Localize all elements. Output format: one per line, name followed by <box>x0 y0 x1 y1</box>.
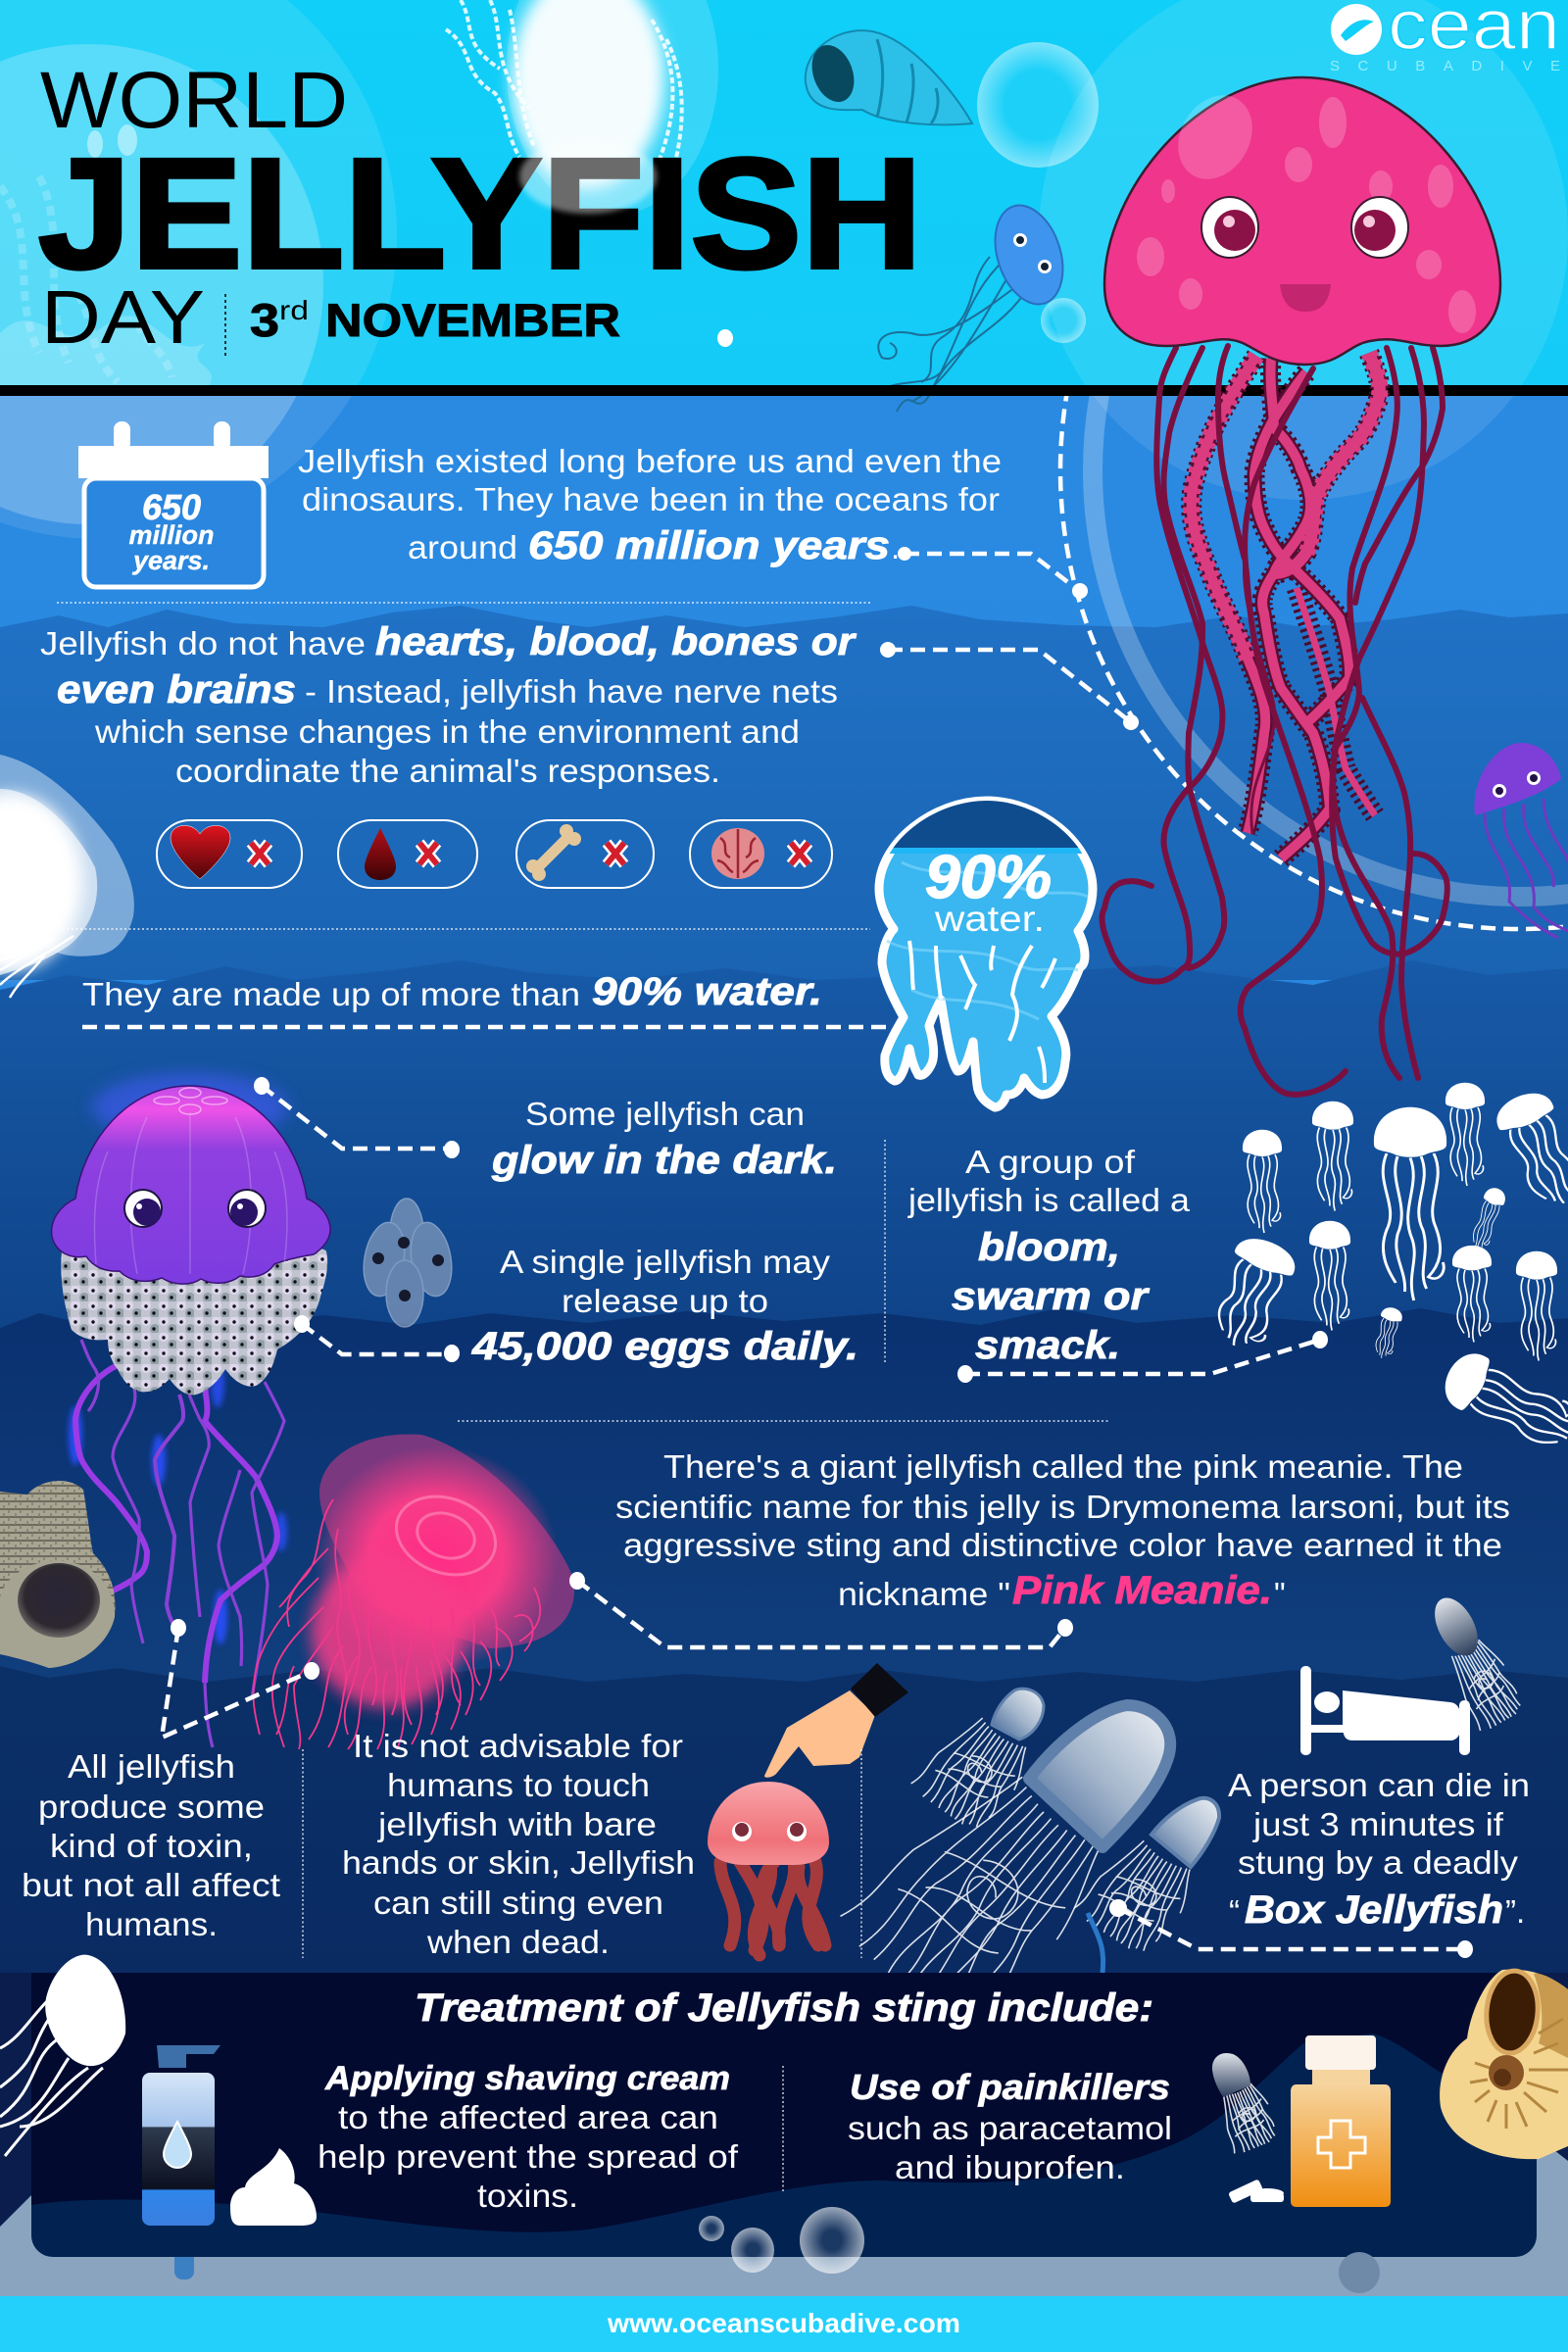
header divider band <box>0 385 1568 396</box>
calendar icon <box>78 421 269 587</box>
treatment: shaving cream: toxins. <box>477 2178 578 2214</box>
connector: bloom <box>957 1331 1328 1383</box>
connector: eggs <box>294 1315 460 1362</box>
header decoration: white jellyfish top centre <box>446 0 718 216</box>
eyes <box>1201 197 1408 258</box>
fact: 650 million years <box>298 443 1002 567</box>
glow around pink jellyfish <box>1039 0 1568 500</box>
big bubble <box>977 42 1099 168</box>
bubbles <box>699 2207 1380 2293</box>
eyes <box>124 1190 266 1227</box>
fact: bloom, swarm or smack: A group of <box>965 1144 1136 1180</box>
glowing body <box>314 1446 559 1671</box>
white jellyfish bloom <box>1201 1083 1568 1463</box>
connector: toxin <box>162 1619 319 1738</box>
drip below panel <box>174 2244 194 2279</box>
treatment: shaving cream: to the affected area can <box>338 2099 718 2135</box>
grey shell <box>0 1481 116 1668</box>
fact: toxin: produce some <box>38 1788 265 1825</box>
treatment: shaving cream: Applying shaving cream <box>324 2060 730 2097</box>
logo: SCUBADIVE <box>1330 58 1560 74</box>
lower seabed band <box>0 2146 1568 2296</box>
fact: no hearts, blood, bones or brains: which sense changes in the environment and <box>94 713 800 750</box>
icon: left white jellyfish over panel <box>0 1955 125 2156</box>
title: DAY <box>41 275 205 360</box>
small blue jellyfish <box>877 197 1075 412</box>
fact: box jellyfish: just 3 minutes if <box>1252 1806 1504 1842</box>
treatment: painkillers <box>848 2067 1172 2185</box>
tentacles <box>69 1340 287 1747</box>
icon: brain crossed <box>690 820 832 888</box>
purple glowing jellyfish <box>52 1073 330 1747</box>
fact: toxin: but not all affect <box>22 1867 280 1903</box>
rings <box>385 1484 507 1588</box>
treatment: painkillers: and ibuprofen. <box>895 2149 1125 2185</box>
icon: eggs <box>359 1199 457 1327</box>
fact: bloom, swarm or smack: jellyfish is called a <box>907 1182 1191 1218</box>
fact: 650 million years: around <box>408 529 517 565</box>
fact: bloom, swarm or smack: smack. <box>975 1324 1120 1367</box>
fact: do not touch: hands or skin, Jellyfish <box>342 1844 695 1881</box>
fact: 90% water: 90% water. <box>592 970 822 1013</box>
fact: no hearts, blood, bones or brains: Jellyfish do not have <box>40 625 366 662</box>
icon: blue shell <box>805 30 972 124</box>
fact: 45,000 eggs: release up to <box>562 1283 768 1319</box>
fact: box jellyfish <box>1228 1767 1530 1932</box>
treatment: painkillers: such as paracetamol <box>848 2110 1172 2146</box>
fact: glow in the dark <box>491 1096 837 1182</box>
dashed circle <box>1058 396 1563 931</box>
fact: box jellyfish: stung by a deadly <box>1238 1844 1519 1881</box>
ring around jellyfish <box>1083 396 1568 906</box>
icon: pointing hand <box>764 1663 908 1778</box>
panel: treatment <box>31 1973 1537 2257</box>
fact: 650 million years: dinosaurs. They have been in the oceans for <box>302 481 1000 517</box>
water jellyfish 90% <box>872 794 1098 1107</box>
fact: pink meanie: " <box>1274 1576 1286 1612</box>
icon: bone crossed <box>516 820 654 888</box>
fact: no hearts, blood, bones or brains <box>40 620 858 789</box>
fact: box jellyfish: Box Jellyfish <box>1245 1888 1503 1932</box>
big pink jellyfish <box>1102 77 1500 1095</box>
title: WORLD <box>40 56 348 145</box>
connector: box jellyfish <box>1109 1899 1473 1958</box>
small bubble <box>1041 298 1086 343</box>
bell <box>1104 77 1500 365</box>
fact: do not touch: humans to touch <box>387 1767 650 1803</box>
fact: toxin: humans. <box>85 1906 218 1942</box>
fact: 45,000 eggs: 45,000 eggs daily. <box>471 1325 858 1368</box>
fact: 45,000 eggs <box>471 1244 858 1368</box>
logo <box>1330 0 1560 74</box>
small box jellyfish in panel <box>1212 2053 1281 2156</box>
treatment: shaving cream: help prevent the spread of <box>318 2138 739 2175</box>
fact: 45,000 eggs: A single jellyfish may <box>500 1244 831 1280</box>
glow <box>92 1073 288 1142</box>
connector: 650 million years <box>898 547 1088 599</box>
fact: do not touch: can still sting even <box>373 1885 663 1921</box>
right small box jellyfish <box>1072 1798 1219 1962</box>
fact: toxin <box>22 1748 280 1942</box>
icon: pills <box>1228 2179 1284 2204</box>
outer bell <box>319 1434 574 1648</box>
fact: bloom, swarm or smack <box>907 1144 1191 1367</box>
fact: do not touch: It is not advisable for <box>353 1728 683 1764</box>
icon: heart crossed <box>157 820 302 888</box>
fact: do not touch: jellyfish with bare <box>377 1806 657 1842</box>
header decoration: pale jellyfish left <box>0 0 397 539</box>
fact: no hearts, blood, bones or brains: hearts, blood, bones or <box>375 620 858 663</box>
dark band behind treatment panel <box>0 1973 1568 2227</box>
fact: box jellyfish: A person can die in <box>1228 1767 1530 1803</box>
fact: 650 million years: Jellyfish existed long before us and even the <box>298 443 1002 479</box>
fact: toxin: kind of toxin, <box>50 1828 253 1864</box>
title <box>38 56 922 360</box>
box jellyfish group <box>834 1591 1528 2041</box>
icon: medicine bottle <box>1291 2035 1391 2207</box>
fact: do not touch: when dead. <box>426 1924 610 1960</box>
treatment heading: Treatment of Jellyfish sting include: <box>415 1986 1153 2030</box>
footer band <box>0 2296 1568 2352</box>
fact: pink meanie: Pink Meanie. <box>1012 1569 1272 1612</box>
fact: pink meanie: There's a giant jellyfish called the pink meanie. The <box>663 1448 1463 1485</box>
fact: bloom, swarm or smack: swarm or <box>952 1275 1151 1318</box>
small purple jellyfish right <box>1474 743 1568 938</box>
pink meanie jellyfish <box>254 1434 574 1749</box>
icon: shaving cream bottle <box>142 2045 220 2226</box>
fact: pink meanie: aggressive sting and distinctive color have earned it the <box>623 1527 1502 1563</box>
tentacle mass <box>311 1555 464 1708</box>
left small box jellyfish <box>908 1689 1044 1838</box>
bell <box>52 1086 330 1284</box>
fact: toxin: All jellyfish <box>68 1748 235 1785</box>
fact: pink meanie <box>615 1448 1510 1612</box>
calendar icon: years. <box>131 546 210 575</box>
calendar icon: million <box>129 520 214 550</box>
fact: 90% water <box>82 970 822 1013</box>
title: JELLYFISH <box>38 125 922 301</box>
icon: blood crossed <box>338 820 477 888</box>
fact: glow in the dark: glow in the dark. <box>491 1139 837 1182</box>
fact: do not touch <box>342 1728 695 1960</box>
icons: missing organs <box>157 820 832 888</box>
icon: foam <box>230 2148 317 2226</box>
fact: no hearts, blood, bones or brains: even brains <box>57 668 296 711</box>
connector: pink meanie <box>569 1572 1073 1647</box>
connector: glow <box>254 1077 460 1158</box>
title: 3 <box>250 294 279 346</box>
small pink jellyfish <box>708 1782 829 1955</box>
fact: 650 million years: . <box>891 529 900 565</box>
icon: golden nautilus shell <box>1440 1969 1568 2159</box>
thin tentacles <box>1102 346 1447 1095</box>
bell spots <box>1137 82 1476 333</box>
fact: box jellyfish: “ <box>1229 1893 1240 1930</box>
fact: glow in the dark: Some jellyfish can <box>525 1096 805 1132</box>
treatment: shaving cream <box>318 2060 739 2214</box>
fact: pink meanie: scientific name for this jelly is Drymonema larsoni, but its <box>615 1489 1510 1525</box>
tentacles <box>254 1499 540 1749</box>
water jellyfish 90%: water. <box>934 899 1045 939</box>
white jellyfish left edge <box>0 755 134 998</box>
fact: no hearts, blood, bones or brains: - Instead, jellyfish have nerve nets <box>305 673 838 710</box>
jellyfish translucent overlap on title <box>519 139 657 214</box>
fact: no hearts, blood, bones or brains: coordinate the animal's responses. <box>175 753 720 789</box>
fact: 650 million years: 650 million years <box>528 524 890 567</box>
connector: no hearts <box>880 642 1139 730</box>
header background <box>0 0 1568 386</box>
white dot <box>717 329 733 347</box>
fact: bloom, swarm or smack: bloom, <box>978 1226 1120 1269</box>
fact: pink meanie: nickname " <box>838 1576 1010 1612</box>
top right box jellyfish <box>1426 1591 1528 1734</box>
fact: 90% water: They are made up of more than <box>82 976 580 1012</box>
footer url: www.oceanscubadive.com <box>607 2308 960 2338</box>
mouth <box>1280 284 1331 312</box>
water jellyfish 90%: 90% <box>925 844 1052 911</box>
icon: bed <box>1300 1666 1470 1755</box>
calendar icon: 650 <box>142 487 201 527</box>
fact: box jellyfish: ”. <box>1505 1893 1525 1930</box>
big box jellyfish <box>834 1705 1170 2041</box>
title: rd <box>279 295 309 325</box>
ruffled arms <box>1192 353 1380 858</box>
title: NOVEMBER <box>325 294 620 346</box>
treatment: painkillers: Use of painkillers <box>850 2067 1170 2107</box>
egg frills <box>61 1243 327 1395</box>
